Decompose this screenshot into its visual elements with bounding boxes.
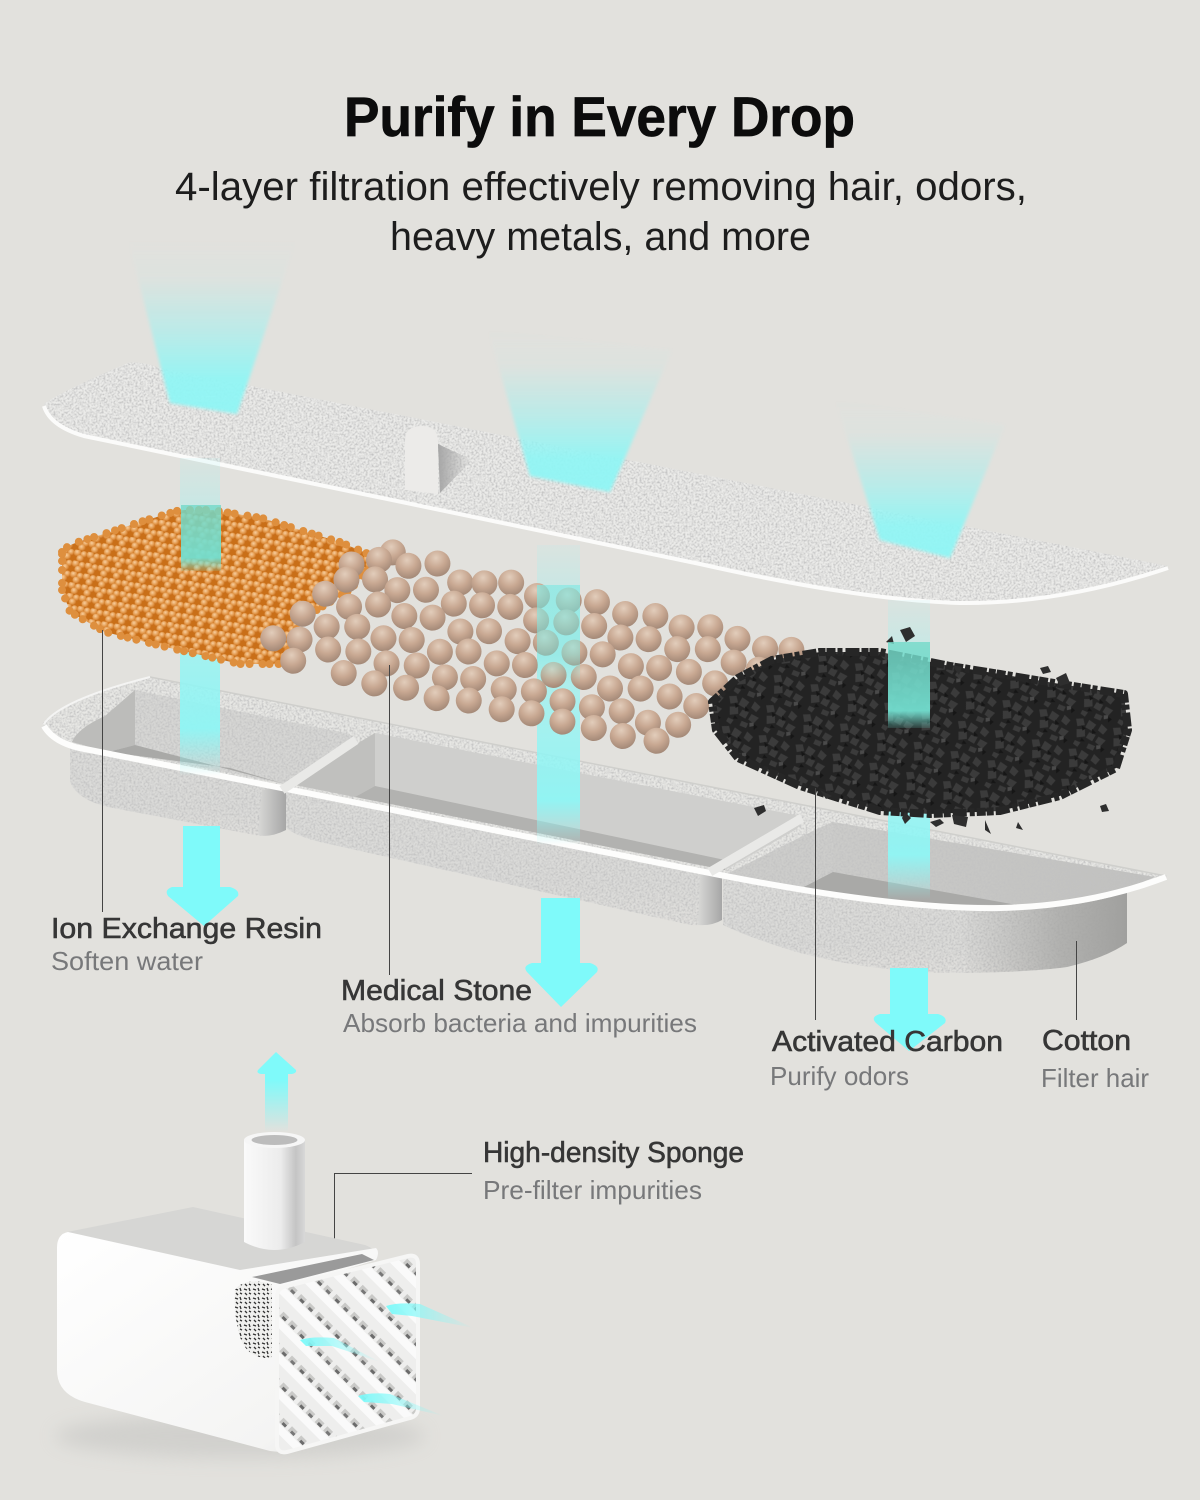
- water funnels: [128, 240, 1005, 558]
- label: cotton: [1041, 1025, 1149, 1093]
- arrow up from pump: [257, 1052, 296, 1132]
- label: medical stone: Medical Stone: [341, 975, 532, 1007]
- beam three over carbon: [888, 642, 930, 728]
- water beams in front of media: [181, 505, 930, 728]
- beam two over stone: [537, 585, 580, 685]
- pump shadow: [55, 1414, 425, 1458]
- top filter plate (cotton layer): [44, 363, 1168, 604]
- nozzle: [244, 1132, 305, 1250]
- pump top face: [67, 1207, 376, 1275]
- tray bodies: [70, 745, 1127, 973]
- beam one: [180, 458, 220, 776]
- label: cotton: Filter hair: [1041, 1063, 1149, 1093]
- funnel two: [488, 330, 672, 492]
- label: cotton: Cotton: [1042, 1025, 1131, 1057]
- pump side: [57, 1232, 378, 1452]
- label: activated carbon: Activated Carbon: [772, 1026, 1003, 1058]
- beam three: [888, 600, 930, 900]
- filter tray: [42, 677, 1168, 973]
- label: high-density sponge: [483, 1137, 744, 1205]
- beam one over resin: [181, 505, 221, 571]
- medical stone beads: [253, 517, 810, 781]
- plate pin: [405, 426, 472, 494]
- leader lines: [102, 630, 1076, 1266]
- compartment one: [72, 690, 355, 784]
- loose granules: [754, 627, 1109, 834]
- subtitle: heavy metals, and more: [390, 215, 811, 259]
- label: ion exchange resin: Soften water: [51, 946, 203, 976]
- water pump: [55, 1132, 474, 1458]
- tray rim: [150, 677, 1166, 876]
- title: Purify in Every Drop: [344, 85, 855, 148]
- funnel one: [128, 240, 296, 414]
- subtitle: [175, 165, 1027, 259]
- compartment three: [725, 822, 1155, 906]
- label: medical stone: Absorb bacteria and impurities: [343, 1008, 697, 1038]
- water beams behind media: [180, 458, 930, 900]
- label: ion exchange resin: Ion Exchange Resin: [51, 913, 322, 945]
- beam two: [537, 545, 580, 845]
- tray top surface: [42, 677, 1168, 908]
- sponge: [235, 1254, 374, 1358]
- label: high-density sponge: Pre-filter impurities: [483, 1175, 702, 1205]
- arrow one: [167, 826, 238, 926]
- arrow three: [874, 968, 946, 1051]
- label: medical stone: [341, 975, 697, 1038]
- label: high-density sponge: High-density Sponge: [483, 1137, 744, 1169]
- subtitle: 4-layer filtration effectively removing hair, odors,: [175, 165, 1027, 209]
- funnel three: [835, 400, 1005, 558]
- arrow two: [525, 898, 598, 1007]
- inflow arrows: [300, 1303, 474, 1416]
- ion exchange resin beads: [62, 510, 378, 664]
- compartment two: [290, 733, 802, 870]
- activated carbon granules: [712, 627, 1128, 834]
- label: ion exchange resin: [51, 913, 322, 976]
- pump front grille: [277, 1254, 418, 1454]
- label: activated carbon: [770, 1026, 1003, 1091]
- label: activated carbon: Purify odors: [770, 1061, 909, 1091]
